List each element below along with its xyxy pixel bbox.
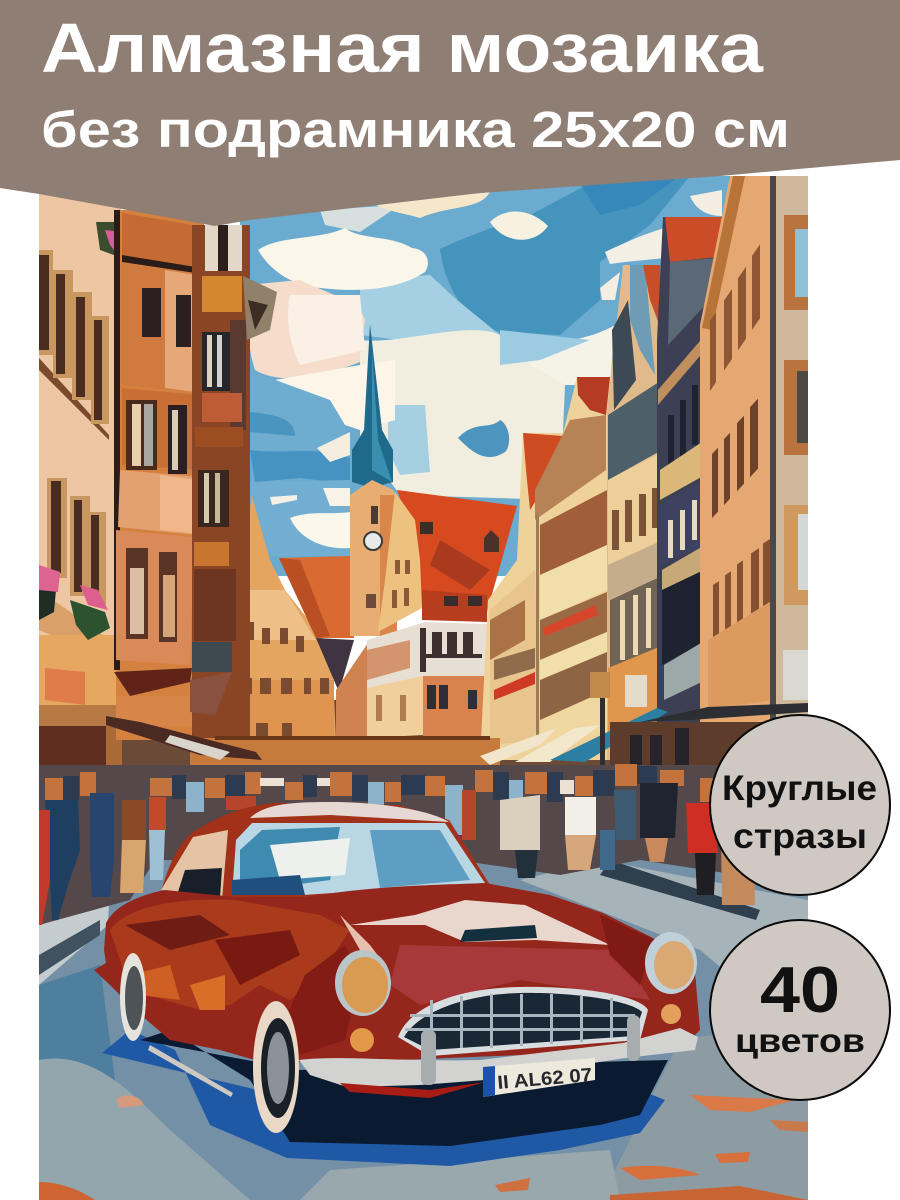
- painting: city street with red car: [39, 176, 808, 1200]
- subtitle: без подрамника 25х20 см: [41, 101, 790, 158]
- badge: round rhinestones: стразы: [733, 817, 867, 856]
- grille: [398, 987, 648, 1056]
- road: [39, 860, 808, 1200]
- title: Алмазная мозаика: [41, 9, 764, 87]
- right middle buildings: [480, 377, 610, 760]
- crowd: [39, 764, 808, 925]
- red car: [94, 802, 700, 1133]
- header banner: [0, 0, 900, 226]
- sky: [240, 176, 740, 576]
- badge: 40 colors: [710, 920, 890, 1100]
- dark side building: [190, 225, 277, 755]
- left building: [39, 190, 122, 790]
- headlights and turn signals: [335, 950, 391, 1016]
- red roof hall: [367, 490, 517, 738]
- clock tower with spire: [350, 324, 397, 636]
- badge: round rhinestones: [710, 715, 890, 895]
- license plate: [483, 1058, 595, 1097]
- street base behind buildings: [122, 700, 610, 765]
- car shadow: [102, 1030, 668, 1166]
- license plate: II AL62 07: [497, 1065, 593, 1094]
- bumper: [299, 1028, 698, 1087]
- badge: 40 colors: цветов: [735, 1022, 865, 1059]
- left flowers: [39, 222, 122, 640]
- right tall buildings: [607, 176, 808, 776]
- badge: 40 colors: 40: [760, 953, 840, 1026]
- dense crowd heads: [45, 764, 720, 802]
- car roof and cabin: [160, 803, 490, 900]
- street arcade and awnings: [106, 672, 808, 765]
- distant building with stepped gable: [250, 496, 367, 736]
- badge: round rhinestones: Круглые: [722, 769, 877, 808]
- orange bay tower: [114, 210, 205, 740]
- wheels: [253, 1001, 299, 1133]
- car body: [94, 883, 700, 1064]
- hood highlights: [350, 900, 610, 945]
